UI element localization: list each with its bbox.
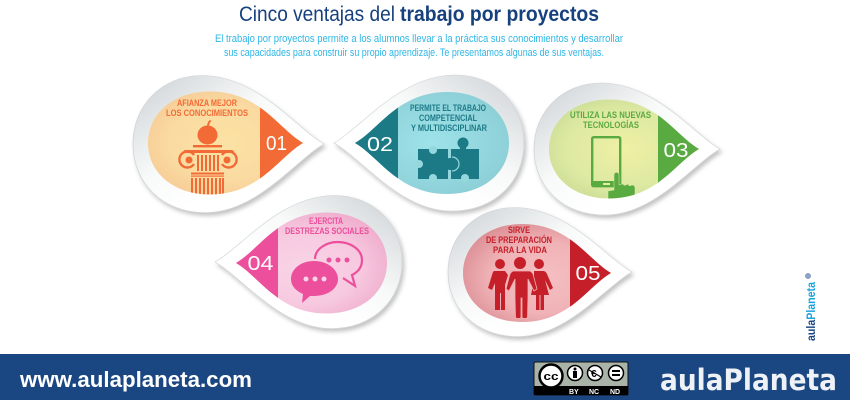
panel: 04 ejercita destrezas sociales [215,196,402,328]
intro text: El trabajo por proyectos permite a los alumnos llevar a la práctica sus conocimientos y desarrollar [215,33,623,45]
title: Cinco ventajas del [239,3,395,26]
heading 05: DE PREPARACIÓN [486,234,552,246]
heading 02: COMPETENCIAL [419,113,477,124]
icon: apple on column [179,120,237,199]
aulaPlaneta wordmark: aulaPlaneta [660,363,837,397]
heading 02: PERMITE EL TRABAJO [410,103,486,114]
heading 05: SIRVE [508,225,530,236]
heading 04: EJERCITA [309,216,343,227]
number 01: 01 [266,133,287,155]
heading 03: UTILIZA LAS NUEVAS [570,110,651,121]
heading 05 [486,225,552,256]
website url: www.aulaplaneta.com [19,367,252,392]
vertical aulaPlaneta logo: aulaPlaneta [806,281,818,341]
number 04: 04 [248,253,274,275]
panel: 01 afianza mejor los conocimientos [133,76,324,212]
heading 03: TECNOLOGÍAS [583,120,639,131]
title [239,3,599,26]
heading 02 [410,103,487,134]
number 02: 02 [367,134,393,156]
icon: smartphone with hand [592,137,635,201]
panel: 05 sirve de preparacion para la vida [448,208,632,336]
heading 01: AFIANZA MEJOR [177,98,237,109]
panel: 03 utiliza las nuevas tecnologias [534,83,720,215]
intro text [215,33,623,59]
heading 05: PARA LA VIDA [493,245,547,256]
icon: puzzle [415,138,479,182]
intro text: sus capacidades para construir su propio aprendizaje. Te presentamos algunas de sus ventajas. [224,47,604,59]
heading 01: LOS CONOCIMIENTOS [166,108,248,119]
icon: speech bubbles [291,242,362,303]
heading 04: DESTREZAS SOCIALES [285,226,369,237]
number 05: 05 [576,263,600,285]
creative commons badge: € [591,369,597,380]
heading 03 [570,110,651,131]
panel: 02 permite el trabajo competencial [334,75,524,211]
creative commons badge: cc [544,371,558,383]
creative commons badge: ND [610,389,620,396]
title: trabajo por proyectos [400,3,599,26]
icon: three people [488,257,553,318]
creative commons badge: NC [589,389,599,396]
footer bar [0,354,850,400]
number 03: 03 [664,140,688,162]
creative commons badge: BY [569,389,579,396]
creative commons badge [534,362,628,396]
heading 04 [285,216,369,237]
heading 02: Y MULTIDISCIPLINAR [411,123,487,134]
heading 01 [166,98,248,119]
